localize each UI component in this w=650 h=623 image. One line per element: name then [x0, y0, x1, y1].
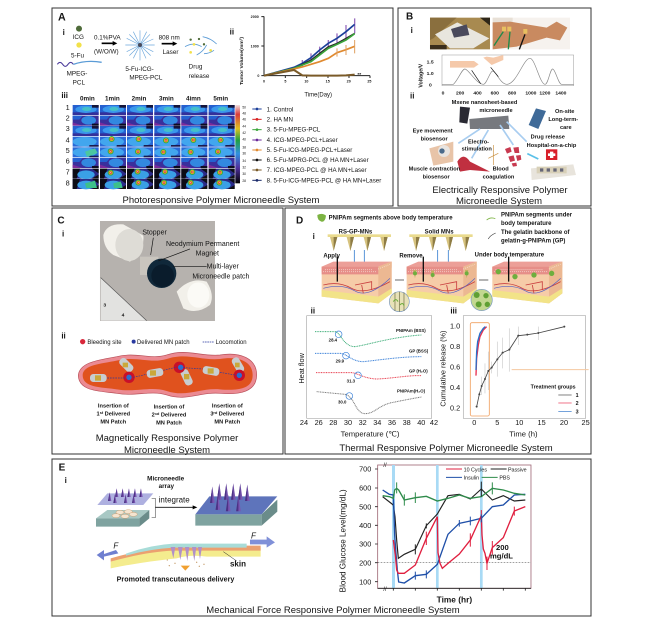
E ii: blood glucose chart: 700 — [359, 465, 371, 474]
B i: voltage chart: 1000 — [525, 90, 537, 96]
A iii: thermal image grid: 6 — [66, 157, 70, 166]
D ii: heat flow chart — [297, 316, 438, 438]
colour scale bar: 48 — [242, 111, 246, 115]
legend: 5. 5-Fu-ICG-MPEG-PCL+Laser — [267, 147, 352, 154]
D iii: cumulative release chart: 25 — [582, 418, 590, 427]
D i: skin application illustration: iii — [450, 306, 457, 315]
panel: C magnetically responsive system: MN Patch — [214, 420, 241, 426]
B i: voltage chart: 0 — [429, 83, 432, 89]
legend: 7. ICG-MPEG-PCL @ HA MN+Laser — [267, 167, 367, 174]
D i: skin application illustration: D — [296, 216, 303, 227]
C title: Magnetically Responsive Polymer — [96, 433, 238, 444]
panel: C magnetically responsive system: Microneedle patch — [192, 273, 250, 280]
D i: skin application illustration: ii — [311, 306, 315, 315]
legend: 3. 5-Fu-MPEG-PCL — [267, 127, 321, 134]
E title: Mechanical Force Responsive Polymer Microneedle System — [206, 605, 460, 616]
D ii: heat flow chart: 42 — [430, 418, 438, 427]
A iii: thermal image grid — [66, 95, 381, 189]
A iii: thermal image grid: 3 — [66, 124, 70, 133]
D title: Thermal Responsive Polymer Microneedle System — [339, 443, 553, 454]
E ii: blood glucose chart: Passive — [508, 467, 527, 473]
C title — [96, 433, 238, 456]
photo: capsule device — [100, 221, 215, 321]
B ii: device illustration: Hospital-on-a-chip — [527, 143, 577, 149]
D iii: cumulative release chart: 3 — [576, 410, 579, 416]
colour scale bar: 34 — [242, 159, 246, 163]
D ii: heat flow chart: GP (H₂O) — [409, 368, 428, 373]
A ii: tumor volume chart: 0 — [257, 74, 259, 78]
A i: synthesis scheme: PCL — [73, 79, 85, 86]
panel: C magnetically responsive system: C — [57, 216, 65, 227]
A ii: tumor volume chart: 0 — [263, 79, 265, 83]
A i: synthesis scheme: MPEG- — [67, 71, 87, 78]
D iii: cumulative release chart: 1.0 — [450, 322, 460, 331]
B i: voltage chart: 1200 — [539, 90, 551, 96]
B title — [432, 185, 568, 207]
legend: Bleeding site — [87, 340, 122, 346]
panel: E mechanical force responsive system — [52, 459, 591, 616]
E i: patch illustration: E — [59, 462, 66, 473]
D ii: heat flow chart: 30 — [344, 418, 352, 427]
A title: Photoresponsive Polymer Microneedle System — [123, 195, 320, 206]
legend — [252, 106, 381, 184]
B ii: device illustration: biosensor — [423, 174, 450, 180]
D i: skin application illustration: Remove — [399, 254, 423, 260]
A iii: thermal image grid: 1min — [105, 95, 120, 102]
D ii: heat flow chart: 38 — [403, 418, 411, 427]
panel: C magnetically responsive system: Stopper — [142, 229, 167, 236]
E ii: blood glucose chart — [338, 463, 531, 605]
legend — [80, 339, 247, 346]
A i: synthesis scheme: Drug — [189, 64, 203, 71]
B title: Electrically Responsive Polymer — [432, 185, 568, 196]
E i: patch illustration: skin — [230, 559, 246, 568]
A iii: thermal image grid: 5 — [66, 146, 70, 155]
A i: synthesis scheme: 0.1%PVA — [94, 35, 121, 42]
photo: capsule device: 3 — [103, 303, 106, 309]
colour scale bar: 50 — [242, 106, 246, 110]
D i: skin application illustration: Under body temperature — [475, 253, 545, 259]
D ii: heat flow chart: 28 — [329, 418, 337, 427]
panel: B electrically responsive system: ii — [410, 91, 414, 100]
E ii: blood glucose chart: 200 — [496, 543, 509, 552]
legend: 6. 5-Fu-MPRG-PCL @ HA MN+Laser — [267, 157, 369, 164]
B ii: device illustration: On-site — [555, 109, 574, 115]
D iii: cumulative release chart: 20 — [560, 418, 568, 427]
B i: voltage chart: 400 — [473, 90, 482, 96]
D iii: cumulative release chart: Time (h) — [509, 429, 538, 438]
blood vessel diagram — [78, 352, 257, 397]
panel: C magnetically responsive system: 3ʳᵈ Delivered — [210, 411, 245, 418]
E ii: blood glucose chart: Insulin — [464, 476, 479, 482]
A i: synthesis scheme: release — [189, 73, 210, 80]
E i: patch illustration: F — [113, 541, 119, 550]
panel: B electrically responsive system: B — [406, 12, 413, 23]
B ii: device illustration: Muscle contraction — [409, 167, 461, 173]
C title: Microneedle System — [124, 445, 210, 456]
E ii: blood glucose chart: 300 — [359, 540, 371, 549]
legend: Delivered MN patch — [137, 340, 190, 346]
colour scale bar: 30 — [242, 172, 246, 176]
panel: D thermal responsive system — [285, 208, 591, 454]
D i: skin application illustration: Solid MNs — [425, 229, 454, 235]
E ii: blood glucose chart: Blood Glucose Level(mg/dL) — [338, 489, 347, 592]
E i: patch illustration: F — [251, 531, 257, 540]
A iii: thermal image grid: 0min — [80, 95, 95, 102]
legend: Locomotion — [216, 340, 247, 346]
panel: C magnetically responsive system: MN Patch — [156, 420, 182, 426]
E ii: blood glucose chart: mg/dL — [490, 551, 513, 560]
colour scale bar: 46 — [242, 118, 246, 122]
panel: B electrically responsive system — [398, 8, 591, 207]
A ii: tumor volume chart — [251, 15, 371, 99]
legend: 8. 5-Fu-ICG-MPEG-PCL @ HA MN+Laser — [267, 177, 381, 184]
panel: B electrically responsive system: i — [411, 26, 413, 35]
D ii: heat flow chart: PNIPAm(H₂O) — [397, 389, 426, 394]
photo: arm with electrodes — [493, 18, 570, 49]
D ii: heat flow chart: 32 — [359, 418, 367, 427]
E i: patch illustration: array — [159, 483, 175, 490]
A i: synthesis scheme: Tumor Volume(mm³) — [239, 37, 245, 85]
E i: patch illustration: integrate — [159, 496, 190, 505]
colour scale bar: 32 — [242, 166, 246, 170]
colour scale bar — [235, 105, 246, 183]
A iii: thermal image grid: 4 — [66, 135, 70, 144]
panel: C magnetically responsive system: MN Patch — [100, 420, 127, 426]
B ii: device illustration: Drug release — [531, 134, 565, 140]
D ii: heat flow chart: 36 — [388, 418, 396, 427]
D iii: cumulative release chart: 0.2 — [450, 403, 460, 412]
D ii: heat flow chart: 24 — [300, 418, 308, 427]
D ii: heat flow chart: Heat flow — [297, 352, 306, 384]
B i: voltage chart: 1400 — [555, 90, 567, 96]
panel: C magnetically responsive system: i — [62, 230, 64, 239]
D iii: cumulative release chart: 0.6 — [450, 362, 460, 371]
D iii: cumulative release chart: 0.4 — [450, 383, 460, 392]
A iii: thermal image grid: 8 — [66, 178, 70, 187]
panel: C magnetically responsive system: Magnet — [196, 250, 219, 257]
D iii: cumulative release chart: 5 — [495, 418, 499, 427]
B ii: device illustration: biosensor — [421, 136, 448, 142]
A i: synthesis scheme: A — [58, 11, 66, 23]
A i: synthesis scheme: ii — [230, 27, 234, 36]
D iii: cumulative release chart: 10 — [515, 418, 523, 427]
B ii: device illustration: Mxene nanosheet-based — [452, 100, 518, 106]
A i: synthesis scheme — [57, 11, 245, 100]
panel: C magnetically responsive system: Neodymium Permanent — [166, 241, 239, 248]
D ii: heat flow chart: 30.0 — [338, 400, 347, 405]
E ii: blood glucose chart: 10 Cycles — [464, 467, 487, 473]
E i: patch illustration: i — [65, 476, 67, 485]
B i: voltage chart: 1.0 — [427, 71, 434, 77]
E ii: blood glucose chart: 200 — [359, 558, 371, 567]
B i: voltage chart: 0 — [442, 90, 445, 96]
D iii: cumulative release chart: 2 — [576, 401, 579, 407]
panel: C magnetically responsive system: Multi-layer — [207, 264, 240, 271]
A ii: tumor volume chart: ** — [357, 72, 361, 78]
D i: skin application illustration: RS-GP-MNs — [339, 229, 373, 235]
A ii: tumor volume chart: 25 — [367, 79, 371, 83]
D i: skin application illustration — [296, 212, 573, 315]
E ii: blood glucose chart: 100 — [359, 577, 371, 586]
A i: synthesis scheme: MPEG-PCL — [129, 75, 163, 82]
A iii: thermal image grid: 2min — [132, 95, 147, 102]
B i: voltage chart: 800 — [508, 90, 517, 96]
A iii: thermal image grid: 5min — [213, 95, 228, 102]
D i: skin application illustration: PNIPAm segments under — [501, 212, 573, 218]
A i: synthesis scheme: 5-Fu-ICG- — [125, 66, 154, 73]
E ii: blood glucose chart: PBS — [499, 476, 510, 482]
B ii: device illustration: Electro- — [468, 139, 489, 145]
panel: C magnetically responsive system: Insertion of — [154, 404, 185, 410]
D i: skin application illustration: gelatin-g-PNIPAm (GP) — [501, 239, 565, 245]
A i: synthesis scheme: iii — [61, 91, 68, 100]
A i: synthesis scheme: 5-Fu — [71, 52, 84, 59]
colour scale bar: 42 — [242, 131, 246, 135]
E ii: blood glucose chart: 500 — [359, 502, 371, 511]
D i: skin application illustration: body temperature — [501, 221, 552, 227]
D i: skin application illustration: The gelatin backbone of — [501, 230, 569, 236]
B ii: device illustration: Eye movement — [413, 128, 453, 134]
A ii: tumor volume chart: 5 — [284, 79, 286, 83]
B ii: device illustration: coagulation — [483, 174, 515, 180]
B ii: device illustration: Long-term- — [548, 117, 578, 123]
A iii: thermal image grid: 3min — [159, 95, 174, 102]
colour scale bar: 40 — [242, 138, 246, 142]
panel: C magnetically responsive system: 2ⁿᵈ Delivered — [152, 411, 187, 418]
B i: voltage chart: 200 — [456, 90, 465, 96]
E ii: blood glucose chart: Time (hr) — [437, 595, 472, 605]
colour scale bar: 38 — [242, 145, 246, 149]
A i: synthesis scheme: Laser — [163, 49, 178, 56]
A i: synthesis scheme: ICG — [73, 34, 84, 41]
A ii: tumor volume chart: 2000 — [251, 15, 259, 19]
D iii: cumulative release chart: 0.8 — [450, 342, 460, 351]
photo: patch on gauze — [430, 18, 490, 49]
E i: patch illustration — [59, 462, 277, 583]
E i: patch illustration: Microneedle — [147, 475, 185, 482]
D iii: cumulative release chart: 15 — [538, 418, 546, 427]
panel: C magnetically responsive system: ii — [61, 331, 66, 340]
B i: voltage chart: 600 — [491, 90, 499, 96]
D ii: heat flow chart: GP (BSS) — [409, 349, 429, 354]
photo: capsule device: 4 — [122, 313, 125, 319]
B i: voltage chart — [418, 55, 574, 96]
B ii: device illustration: Blood — [493, 167, 509, 173]
E ii: blood glucose chart: // — [383, 463, 387, 469]
A ii: tumor volume chart: 15 — [326, 79, 330, 83]
legend: 4. ICG-MPEG-PCL+Laser — [267, 137, 338, 144]
A ii: tumor volume chart: 10 — [304, 79, 308, 83]
B i: voltage chart: 1.5 — [427, 60, 434, 66]
D iii: cumulative release chart: Treatment groups — [531, 384, 576, 390]
B i: voltage chart: Voltage/V — [418, 63, 424, 88]
D ii: heat flow chart: 29.9 — [336, 358, 345, 363]
D ii: heat flow chart: 34 — [373, 418, 381, 427]
B title: Microneedle System — [456, 196, 542, 207]
E ii: blood glucose chart: 600 — [359, 484, 371, 493]
B ii: device illustration — [409, 100, 578, 180]
B ii: device illustration: stimulation — [462, 147, 492, 153]
legend: 1. Control — [267, 106, 293, 113]
A i: synthesis scheme: i — [63, 28, 65, 37]
B ii: device illustration: care — [560, 125, 572, 131]
colour scale bar: 36 — [242, 152, 246, 156]
A i: synthesis scheme: (W/O/W) — [94, 48, 119, 55]
legend: 2. HA MN — [267, 117, 293, 124]
A iii: thermal image grid: 2 — [66, 114, 70, 123]
D ii: heat flow chart: 40 — [417, 418, 425, 427]
E i: patch illustration: Promoted transcutaneous delivery — [117, 575, 234, 583]
A iii: thermal image grid: 1 — [66, 103, 70, 112]
D iii: cumulative release chart — [439, 316, 590, 438]
colour scale bar: 44 — [242, 124, 246, 128]
panel: C magnetically responsive system: Insertion of — [212, 404, 243, 410]
panel: A photoresponsive system — [52, 8, 393, 206]
panel: C magnetically responsive system — [52, 208, 283, 456]
D i: skin application illustration: Apply — [323, 254, 341, 260]
A i: synthesis scheme: 808 nm — [159, 35, 180, 42]
D i: skin application illustration: PNIPAm segments above body temperature — [329, 216, 453, 222]
A iii: thermal image grid: 4imn — [186, 95, 201, 102]
panel: C magnetically responsive system: Insertion of — [98, 404, 129, 410]
A iii: thermal image grid: 7 — [66, 167, 70, 176]
D ii: heat flow chart: 26 — [315, 418, 323, 427]
D ii: heat flow chart: 31.3 — [347, 379, 356, 384]
colour scale bar: 28 — [242, 179, 246, 183]
D i: skin application illustration: i — [313, 232, 315, 241]
E ii: blood glucose chart: // — [383, 587, 387, 593]
A ii: tumor volume chart: 20 — [347, 79, 351, 83]
D ii: heat flow chart: PNIPAm (BSS) — [396, 328, 426, 333]
D iii: cumulative release chart: 0 — [472, 418, 476, 427]
A ii: tumor volume chart: Time(Day) — [304, 93, 332, 99]
B ii: device illustration: microneedle — [479, 108, 513, 114]
D iii: cumulative release chart: 1 — [576, 393, 579, 399]
E ii: blood glucose chart: 400 — [359, 521, 371, 530]
D ii: heat flow chart: 28.4 — [329, 337, 338, 342]
D ii: heat flow chart: Temperature (℃) — [341, 429, 400, 438]
panel: C magnetically responsive system: 1ˢᵗ Delivered — [97, 411, 131, 418]
A ii: tumor volume chart: 1000 — [251, 44, 259, 48]
D iii: cumulative release chart: Cumulative release (%) — [439, 330, 448, 407]
